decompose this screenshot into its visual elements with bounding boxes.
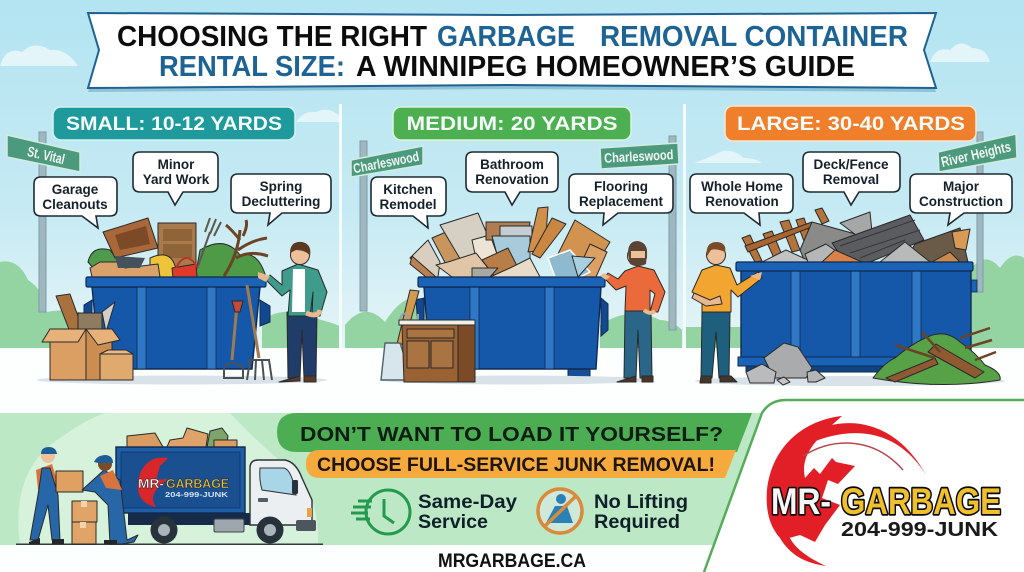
title text: REMOVAL CONTAINER xyxy=(600,21,908,53)
ground line xyxy=(16,544,323,545)
callout: Whole Home Renovation xyxy=(690,174,793,225)
debris pile: renovation materials xyxy=(410,207,610,277)
ground xyxy=(0,348,1024,572)
street sign: Charleswood right xyxy=(600,136,679,330)
heading pill: small xyxy=(53,107,295,140)
yard tools xyxy=(224,285,272,380)
banner background xyxy=(0,413,770,545)
heading pill: medium: MEDIUM: 20 YARDS xyxy=(406,113,618,135)
ground shadow xyxy=(695,376,1005,386)
logo phone number: 204-999-JUNK xyxy=(841,519,999,541)
street sign: Charleswood left xyxy=(351,141,423,311)
panel: small 10-12 yards xyxy=(7,107,331,384)
street sign: Charleswood right: Charleswood xyxy=(604,147,674,166)
callout: Minor Yard Work xyxy=(133,152,218,205)
person: orange-red sweater xyxy=(600,241,665,382)
delivery truck xyxy=(116,428,316,544)
truck logo xyxy=(138,457,229,507)
title text: CHOOSING THE RIGHT xyxy=(117,21,427,53)
heading pill: large: LARGE: 30-40 YARDS xyxy=(737,113,965,135)
title text: GARBAGE xyxy=(437,21,575,53)
dumpster: large xyxy=(736,262,977,372)
callout: Deck/Fence Removal: Removal xyxy=(823,172,879,187)
workers loading boxes xyxy=(29,447,138,544)
callout: Kitchen Remodel: Remodel xyxy=(379,197,437,212)
brush pile xyxy=(873,328,1000,385)
logo wordmark xyxy=(771,481,1001,522)
heading pill: medium xyxy=(393,107,631,140)
truck cargo boxes xyxy=(127,428,237,447)
light blob behind truck xyxy=(18,413,318,545)
headline pill: green xyxy=(277,413,752,452)
logo wordmark: MR- xyxy=(771,481,831,522)
heading pill: small: SMALL: 10-12 YARDS xyxy=(66,113,282,135)
rock pile xyxy=(746,343,825,385)
street sign: St. Vital: St. Vital xyxy=(26,143,66,168)
text: No Lifting Required: No Lifting xyxy=(594,491,688,513)
background hills xyxy=(0,256,1024,348)
cardboard boxes xyxy=(42,294,133,380)
callout: Major Construction xyxy=(910,174,1012,225)
callout: Garage Cleanouts: Garage xyxy=(52,182,99,197)
worker right xyxy=(82,455,138,544)
text: No Lifting Required xyxy=(594,491,688,533)
street sign: River Heights xyxy=(938,132,1017,292)
callout: Kitchen Remodel xyxy=(371,177,446,228)
icon: clock with speed lines xyxy=(351,490,410,534)
headline pill: green: DON’T WANT TO LOAD IT YOURSELF? xyxy=(300,423,723,446)
text: No Lifting Required: Required xyxy=(594,511,680,533)
text: Same-Day Service: Service xyxy=(418,511,488,533)
panel: large 30-40 yards xyxy=(690,106,1017,386)
dumpster: medium xyxy=(416,277,608,379)
carried box xyxy=(56,471,83,492)
callout: Minor Yard Work: Yard Work xyxy=(143,172,210,187)
person: teal shirt xyxy=(258,242,327,382)
callout: Kitchen Remodel: Kitchen xyxy=(383,182,433,197)
callout: Flooring Replacement: Flooring xyxy=(594,179,648,194)
stacked boxes xyxy=(72,501,97,544)
callout: Whole Home Renovation: Whole Home xyxy=(701,179,783,194)
vanity cabinet and mirror xyxy=(381,290,475,382)
ground shadow xyxy=(37,376,327,384)
debris pile: household xyxy=(88,218,268,279)
headline pill: orange: CHOOSE FULL-SERVICE JUNK REMOVAL! xyxy=(317,455,715,476)
website URL: MRGARBAGE.CA xyxy=(438,551,586,572)
ground shadow xyxy=(380,376,652,384)
street sign: Charleswood left: Charleswood xyxy=(352,149,420,177)
truck logo: MR- xyxy=(138,476,164,491)
panel dividers xyxy=(339,104,686,348)
callout: Garage Cleanouts: Cleanouts xyxy=(42,197,108,212)
worker left xyxy=(29,447,64,544)
street sign: River Heights: River Heights xyxy=(939,138,1012,170)
callout: Major Construction: Major xyxy=(943,179,980,194)
heading pill: large xyxy=(725,106,976,141)
truck logo: 204-999-JUNK xyxy=(165,492,228,499)
callout: Garage Cleanouts xyxy=(34,177,117,228)
text: Same-Day Service xyxy=(418,491,517,533)
callout: Bathroom Renovation: Renovation xyxy=(475,172,549,187)
callout: Spring Decluttering: Decluttering xyxy=(242,194,320,209)
callout: Whole Home Renovation: Renovation xyxy=(705,194,779,209)
callout: Minor Yard Work: Minor xyxy=(158,157,195,172)
headline pill: orange xyxy=(306,450,736,478)
sky background xyxy=(0,0,1024,350)
truck logo: GARBAGE xyxy=(166,476,229,491)
title text: A WINNIPEG HOMEOWNER’S GUIDE xyxy=(356,51,855,83)
clouds xyxy=(0,43,990,163)
title text: RENTAL SIZE: xyxy=(159,51,345,83)
person: yellow shirt xyxy=(692,242,762,383)
callout: Deck/Fence Removal xyxy=(803,152,900,205)
full-service banner xyxy=(0,413,770,545)
callout: Deck/Fence Removal: Deck/Fence xyxy=(813,157,889,172)
dumpster: small xyxy=(84,277,270,369)
callout: Spring Decluttering xyxy=(231,174,331,225)
title banner xyxy=(88,13,936,92)
panel: medium 20 yards xyxy=(351,107,679,384)
callout: Bathroom Renovation: Bathroom xyxy=(480,157,544,172)
callout: Spring Decluttering: Spring xyxy=(260,179,302,194)
callout: Major Construction: Construction xyxy=(919,194,1003,209)
callout: Flooring Replacement xyxy=(569,174,673,225)
logo: red maple swoosh xyxy=(767,416,926,566)
title text xyxy=(117,21,908,83)
icon: no lifting xyxy=(538,489,582,533)
logo panel xyxy=(704,400,1024,572)
debris pile: construction xyxy=(742,208,970,262)
street sign: St. Vital xyxy=(7,132,80,312)
callout: Bathroom Renovation xyxy=(466,152,558,205)
callout: Flooring Replacement: Replacement xyxy=(579,194,664,209)
text: Same-Day Service: Same-Day xyxy=(418,491,517,513)
